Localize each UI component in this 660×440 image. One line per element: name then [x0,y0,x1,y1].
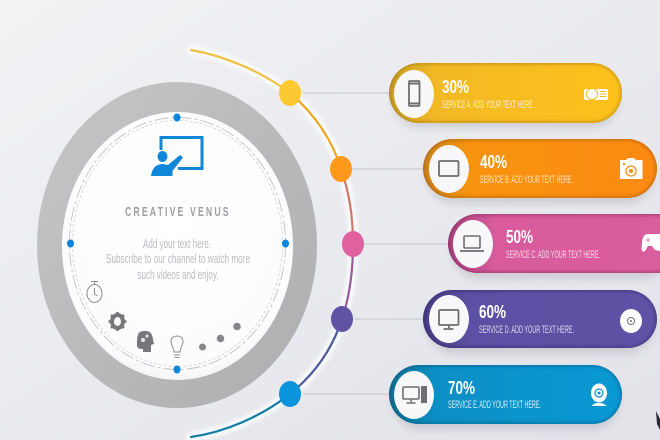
icon: camera [620,158,642,179]
curved timeline arc [191,50,353,437]
body text: Add your text here. [143,236,211,251]
body text [106,236,250,282]
panel: service E [389,365,622,430]
connector lines [303,93,450,394]
icon: webcam [591,384,607,406]
icon: game controller [642,234,660,252]
icon: disc [620,309,642,333]
timeline node: blue [279,381,301,407]
body text: Subscribe to our channel to watch more [106,251,250,266]
blue dot: right [282,240,289,248]
heading: CREATIVE VENUS [125,206,229,219]
panel: service A [389,63,622,128]
decorative gray dots [199,323,241,350]
percentage: 70% [448,378,475,398]
icon: projector [584,88,608,100]
percentage: 50% [506,227,533,247]
icon: gear [108,312,126,331]
panel: service C [448,214,660,279]
icon disc: monitor [429,295,469,343]
icon: teacher at board [151,138,202,176]
icon: light bulb [171,336,183,358]
icon disc: phone [394,70,434,118]
percentage: 30% [442,77,469,97]
panel: service D [423,290,657,354]
icon: head with gears [137,331,154,352]
icon disc: laptop [453,220,493,268]
percentage: 40% [480,152,507,172]
timeline node: pink [342,231,364,257]
logo mark: corner [656,411,660,430]
percentage: 60% [479,302,506,322]
panel: service B [423,139,657,204]
blue dot: bottom [174,366,180,374]
panel: central white circle [62,112,293,380]
icon: stopwatch [87,282,102,302]
timeline node: orange [330,156,352,182]
timeline node: purple [331,306,353,332]
gray outer ring [37,82,317,408]
timeline node: yellow [279,80,301,106]
icon disc: tablet [429,145,469,193]
blue dot: top [174,114,180,122]
blue dot: left [67,240,74,248]
body text: such videos and enjoy. [138,267,218,282]
panel: service A: SERVICE A. ADD YOUR TEXT HERE. [442,99,534,111]
panel: service E: SERVICE E. ADD YOUR TEXT HERE. [448,399,541,411]
icon disc: desktop computer [394,371,434,419]
